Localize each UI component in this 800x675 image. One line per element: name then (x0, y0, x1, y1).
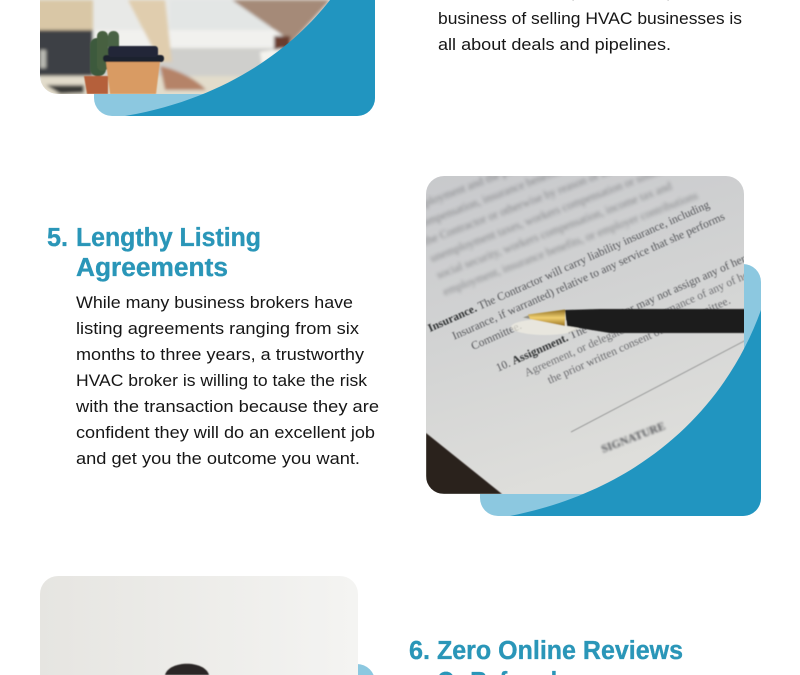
heading: item 5: Agreements (76, 254, 228, 282)
text block: item 5 body copy: with the transaction because they are (75, 397, 379, 416)
photo: contract document with pen: the Contractor or otherwise by reason of such engagement (422, 140, 678, 248)
panel: item 5 photo card (426, 176, 761, 516)
text block: item 5 body copy: months to three years, a trustworthy (76, 345, 365, 364)
photo: contract document with pen: compensation, insurance benefits and other payments due (416, 125, 668, 231)
pen (511, 309, 750, 335)
photo: contract document with pen: 10. Assignment. The Contractor may not assign any of her rights (494, 241, 774, 374)
heading: item 6 (409, 637, 683, 675)
heading: item 6: 6. (409, 637, 430, 665)
text block: item 5 body copy: confident they will do an excellent job (76, 423, 375, 442)
heading: item 6: Zero Online Reviews (437, 637, 683, 665)
text block: item 4 body copy (438, 0, 742, 54)
photo: contract document with pen: social security, workers compensation, income tax and (435, 180, 674, 282)
photo: desk with coffee cup and cactus (40, 0, 330, 94)
card backing: light blue (94, 664, 375, 675)
heading: item 5 (47, 224, 261, 282)
photo: contract document with pen: Committee. (469, 320, 524, 353)
photo: contract document with pen: employment and the parties agree that services rendered (409, 111, 655, 214)
photo: contract document with pen: Agreement, or delegate the performance of any of her (523, 268, 754, 379)
photo: contract document with pen: Insurance, if warranted) relative to any service that she performs (451, 211, 727, 343)
photo: contract document with pen: unemployment taxes, workers compensation or similar (429, 163, 669, 265)
text block: item 5 body copy (75, 293, 379, 468)
panel: item 4 photo card (36, 0, 375, 116)
text block: item 5 body copy: HVAC broker is willing to take the risk (76, 371, 368, 390)
panel: item 6 photo card (40, 576, 375, 675)
photo: contract document with pen: employment, insurance benefits, or employer contributions (442, 190, 700, 298)
heading: item 5: 5. (47, 224, 68, 252)
photo: contract document with pen (426, 176, 744, 494)
text block: item 4 body copy: business of selling HVAC businesses is (438, 9, 742, 28)
photo: person against pale wall (40, 576, 358, 675)
heading: item 5: Lengthy Listing (76, 224, 261, 252)
card accent: dark blue curve (125, 0, 375, 116)
text block: item 5 body copy: While many business brokers have (76, 293, 353, 312)
dark table corner (426, 433, 502, 494)
text block: item 4 body copy: all about deals and pipelines. (438, 35, 671, 54)
card backing: light blue (94, 0, 375, 116)
text block: item 5 body copy: and get you the outcome you want. (76, 449, 360, 468)
photo: contract document with pen: the prior written consent of the Committee. (546, 295, 733, 387)
card backing: light blue (480, 264, 761, 516)
text block: item 5 body copy: listing agreements ranging from six (76, 319, 360, 338)
card accent: dark blue curve (510, 310, 761, 516)
photo: contract document with pen: SIGNATURE (600, 420, 667, 456)
photo: contract document with pen: Insurance. The Contractor will carry liability insurance, including (426, 199, 712, 335)
